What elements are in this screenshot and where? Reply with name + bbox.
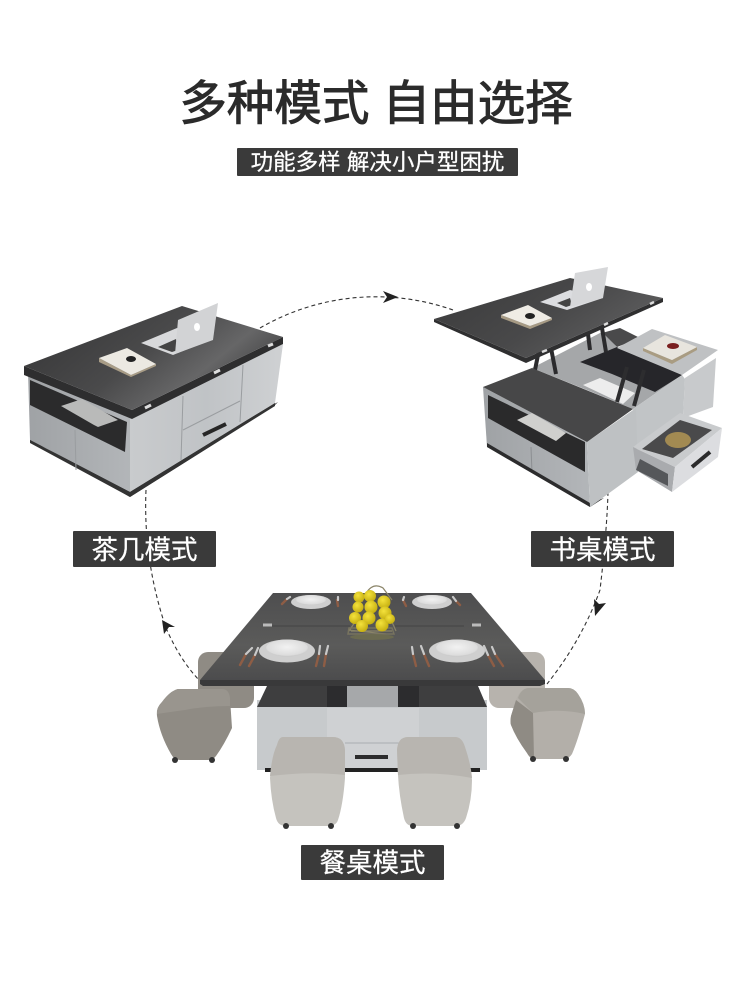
under-top dark right (419, 686, 487, 707)
lid book (643, 335, 697, 364)
right stool (510, 688, 585, 762)
table top (200, 593, 545, 680)
label: dining table mode: 餐桌模式 (320, 848, 426, 878)
title: 多种模式 自由选择 (179, 78, 573, 131)
left face (28, 372, 132, 492)
centre light panel (347, 686, 398, 707)
table seam (269, 625, 464, 627)
cutlery (240, 597, 503, 666)
subtitle tag: 功能多样 解决小户型困扰 (251, 150, 504, 175)
interior cavity (532, 332, 682, 409)
label: desk mode: 书桌模式 (550, 535, 656, 565)
table top edge (200, 680, 545, 686)
lift arms lower (617, 367, 644, 406)
plates: back right (412, 595, 452, 609)
edge latches (145, 344, 273, 408)
shelf book (61, 399, 118, 427)
back lid (602, 328, 640, 347)
coffee table mode (24, 303, 283, 497)
latches (263, 624, 481, 626)
laptop (141, 303, 218, 355)
open shelf (30, 380, 127, 452)
drawer line (345, 742, 400, 744)
niche book (517, 413, 566, 441)
plates: front right (429, 640, 485, 662)
drawer handle (355, 755, 388, 759)
left block seam (531, 447, 532, 473)
right face (130, 344, 283, 492)
front right stool (397, 737, 472, 829)
back left stool (198, 652, 254, 708)
bottom edge (30, 403, 275, 497)
left block niche (488, 395, 585, 472)
arrow: top, pointing right (383, 291, 398, 303)
left block lid (483, 368, 633, 442)
table top (24, 306, 283, 410)
inner book (583, 378, 635, 404)
left block left face (483, 387, 590, 507)
plinth (30, 402, 278, 497)
edge latches (542, 302, 654, 352)
label: desk mode (531, 531, 674, 567)
right side panels (683, 358, 716, 418)
table top edge (24, 337, 283, 419)
dashed cycle arc: right (547, 492, 608, 684)
centre cavity (327, 686, 419, 707)
open drawer (633, 413, 722, 492)
dining mode (157, 586, 585, 829)
plates: back left (291, 595, 331, 609)
drawer handle (203, 424, 226, 435)
right lid (617, 329, 718, 375)
front left stool (270, 737, 345, 829)
arrow: left, pointing up-left (162, 620, 175, 634)
book (99, 348, 156, 377)
mechanism (580, 347, 682, 392)
label: coffee table mode: 茶几模式 (92, 535, 198, 565)
label: coffee table mode (73, 531, 216, 567)
table body (257, 700, 487, 770)
bottom edge (487, 443, 604, 507)
label: dining table mode (301, 845, 444, 880)
plates: front left (259, 640, 315, 662)
desk mode (434, 267, 722, 507)
dashed cycle arc: top (260, 297, 453, 328)
lifted top (434, 278, 663, 358)
dashed cycle arc: left (146, 490, 199, 680)
body centre panel (327, 708, 419, 768)
left block right face (587, 408, 638, 507)
under-top dark (257, 686, 327, 707)
book (501, 305, 552, 329)
left stool (157, 689, 232, 763)
laptop (540, 267, 608, 310)
plinth (265, 768, 480, 772)
arrow: right, pointing down-left (594, 599, 606, 616)
panel seams (75, 365, 243, 470)
lift legs (535, 328, 606, 374)
back right stool (489, 652, 545, 708)
lifted top edge (434, 298, 663, 363)
fruit basket (348, 586, 396, 640)
